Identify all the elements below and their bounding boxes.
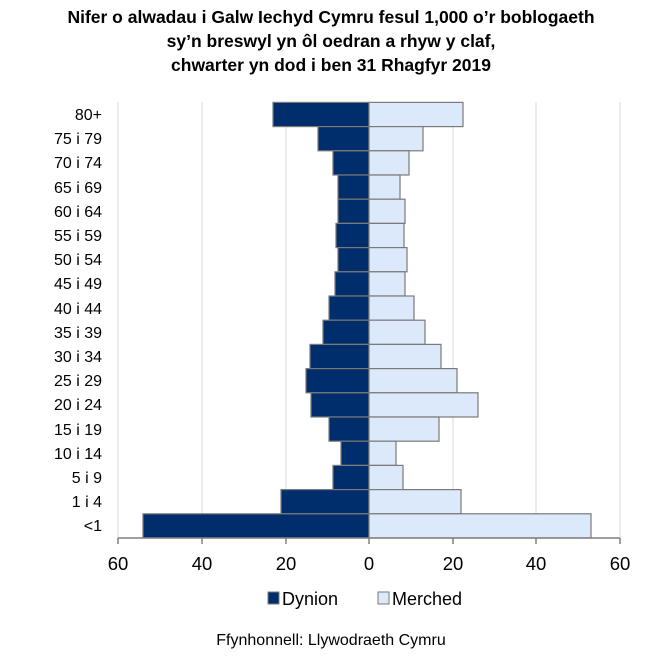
- y axis labels: 80+: [75, 107, 102, 124]
- y axis labels: 30 i 34: [54, 349, 102, 366]
- title: Nifer o alwadau i Galw Iechyd Cymru fesul 1,000 o’r boblogaeth: [67, 7, 595, 27]
- y axis labels: 40 i 44: [54, 301, 102, 318]
- x axis labels: 40: [526, 553, 546, 574]
- y axis labels: 45 i 49: [54, 276, 102, 293]
- y axis labels: 5 i 9: [72, 470, 102, 487]
- x axis labels: 60: [610, 553, 630, 574]
- title: chwarter yn dod i ben 31 Rhagfyr 2019: [171, 55, 491, 75]
- legend: Merched: [392, 589, 462, 609]
- x axis labels: 20: [276, 553, 296, 574]
- title: [67, 7, 595, 75]
- source: Ffynhonnell: Llywodraeth Cymru: [216, 632, 446, 649]
- x axis labels: 40: [192, 553, 212, 574]
- y axis labels: <1: [84, 518, 102, 535]
- y axis labels: 35 i 39: [54, 325, 102, 342]
- legend: [268, 589, 462, 609]
- y axis labels: 75 i 79: [54, 131, 102, 148]
- x axis labels: 60: [108, 553, 128, 574]
- x axis: [118, 538, 620, 544]
- y axis labels: 15 i 19: [54, 422, 102, 439]
- y axis labels: 55 i 59: [54, 228, 102, 245]
- title: sy’n breswyl yn ôl oedran a rhyw y claf,: [167, 31, 495, 51]
- y axis labels: 60 i 64: [54, 204, 102, 221]
- y axis labels: 65 i 69: [54, 180, 102, 197]
- x axis labels: [108, 553, 630, 574]
- y axis labels: 20 i 24: [54, 397, 102, 414]
- legend: Dynion: [282, 589, 338, 609]
- bar chart: [54, 102, 630, 574]
- x axis labels: 0: [364, 553, 374, 574]
- y axis labels: [54, 107, 102, 535]
- y axis labels: 70 i 74: [54, 155, 102, 172]
- y axis labels: 25 i 29: [54, 373, 102, 390]
- y axis labels: 1 i 4: [72, 494, 102, 511]
- female bars: [369, 102, 591, 538]
- y axis labels: 50 i 54: [54, 252, 102, 269]
- male bars: [143, 102, 369, 538]
- y axis labels: 10 i 14: [54, 446, 102, 463]
- x axis labels: 20: [443, 553, 463, 574]
